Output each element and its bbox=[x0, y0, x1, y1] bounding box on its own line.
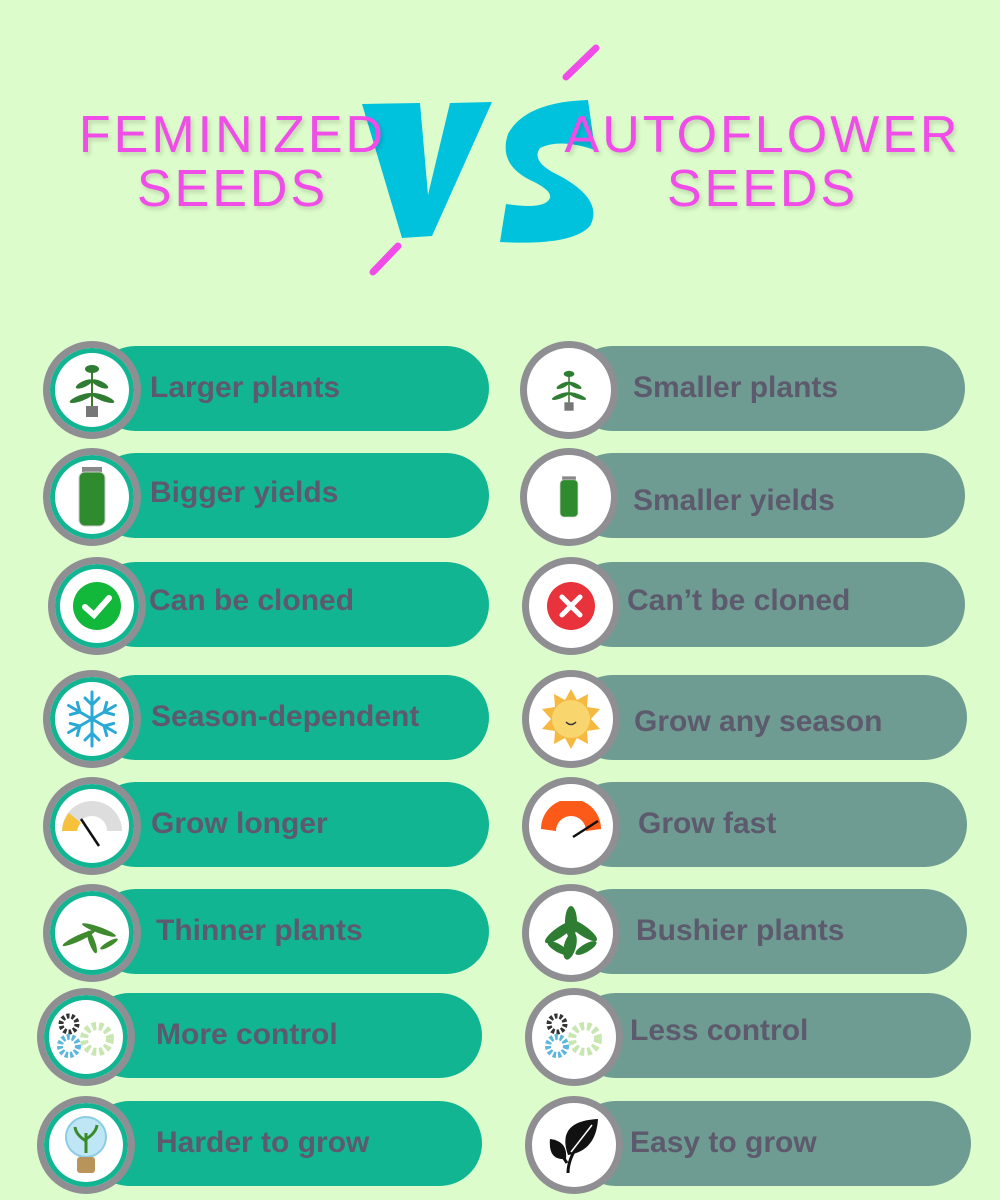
row 8 left bbox=[37, 1096, 482, 1194]
row 7 right bbox=[525, 988, 971, 1086]
title right: SEEDS bbox=[667, 160, 858, 218]
row 7 right: Less control bbox=[630, 1014, 808, 1047]
row 5 right bbox=[522, 777, 967, 875]
title right: AUTOFLOWER bbox=[565, 106, 960, 164]
row 7 left: More control bbox=[156, 1018, 338, 1051]
row 5 left: Grow longer bbox=[151, 807, 328, 840]
row 2 left: Bigger yields bbox=[150, 476, 338, 509]
S bbox=[500, 100, 595, 243]
row 3 left bbox=[48, 557, 489, 655]
slash bottom bbox=[373, 246, 398, 272]
row 4 left bbox=[43, 670, 489, 768]
row 2 right bbox=[520, 448, 965, 546]
row 8 right: Easy to grow bbox=[630, 1126, 817, 1159]
row 7 left bbox=[37, 988, 482, 1086]
row 3 right bbox=[522, 557, 965, 655]
row 2 right: Smaller yields bbox=[633, 484, 835, 517]
row 3 left: Can be cloned bbox=[149, 584, 354, 617]
row 3 right: Can’t be cloned bbox=[627, 584, 850, 617]
row 1 right: Smaller plants bbox=[633, 371, 838, 404]
title: VS graphic bbox=[362, 44, 600, 276]
title left bbox=[79, 106, 386, 218]
row 1 left bbox=[43, 341, 489, 439]
row 8 right bbox=[525, 1096, 971, 1194]
row 4 left: Season-dependent bbox=[151, 700, 419, 733]
title left: SEEDS bbox=[137, 160, 328, 218]
row 6 left bbox=[43, 884, 489, 982]
row 1 right bbox=[520, 341, 965, 439]
slash top bbox=[566, 48, 596, 77]
row 4 right bbox=[522, 670, 967, 768]
V bbox=[362, 102, 492, 238]
row 2 left bbox=[43, 448, 489, 546]
row 4 right: Grow any season bbox=[634, 705, 882, 738]
row 5 left bbox=[43, 777, 489, 875]
row 1 left: Larger plants bbox=[150, 371, 340, 404]
row 8 left: Harder to grow bbox=[156, 1126, 369, 1159]
title right bbox=[564, 106, 960, 218]
row 6 left: Thinner plants bbox=[156, 914, 363, 947]
row 6 right: Bushier plants bbox=[636, 914, 844, 947]
row 6 right bbox=[522, 884, 967, 982]
row 5 right: Grow fast bbox=[638, 807, 776, 840]
title left: FEMINIZED bbox=[79, 106, 386, 164]
